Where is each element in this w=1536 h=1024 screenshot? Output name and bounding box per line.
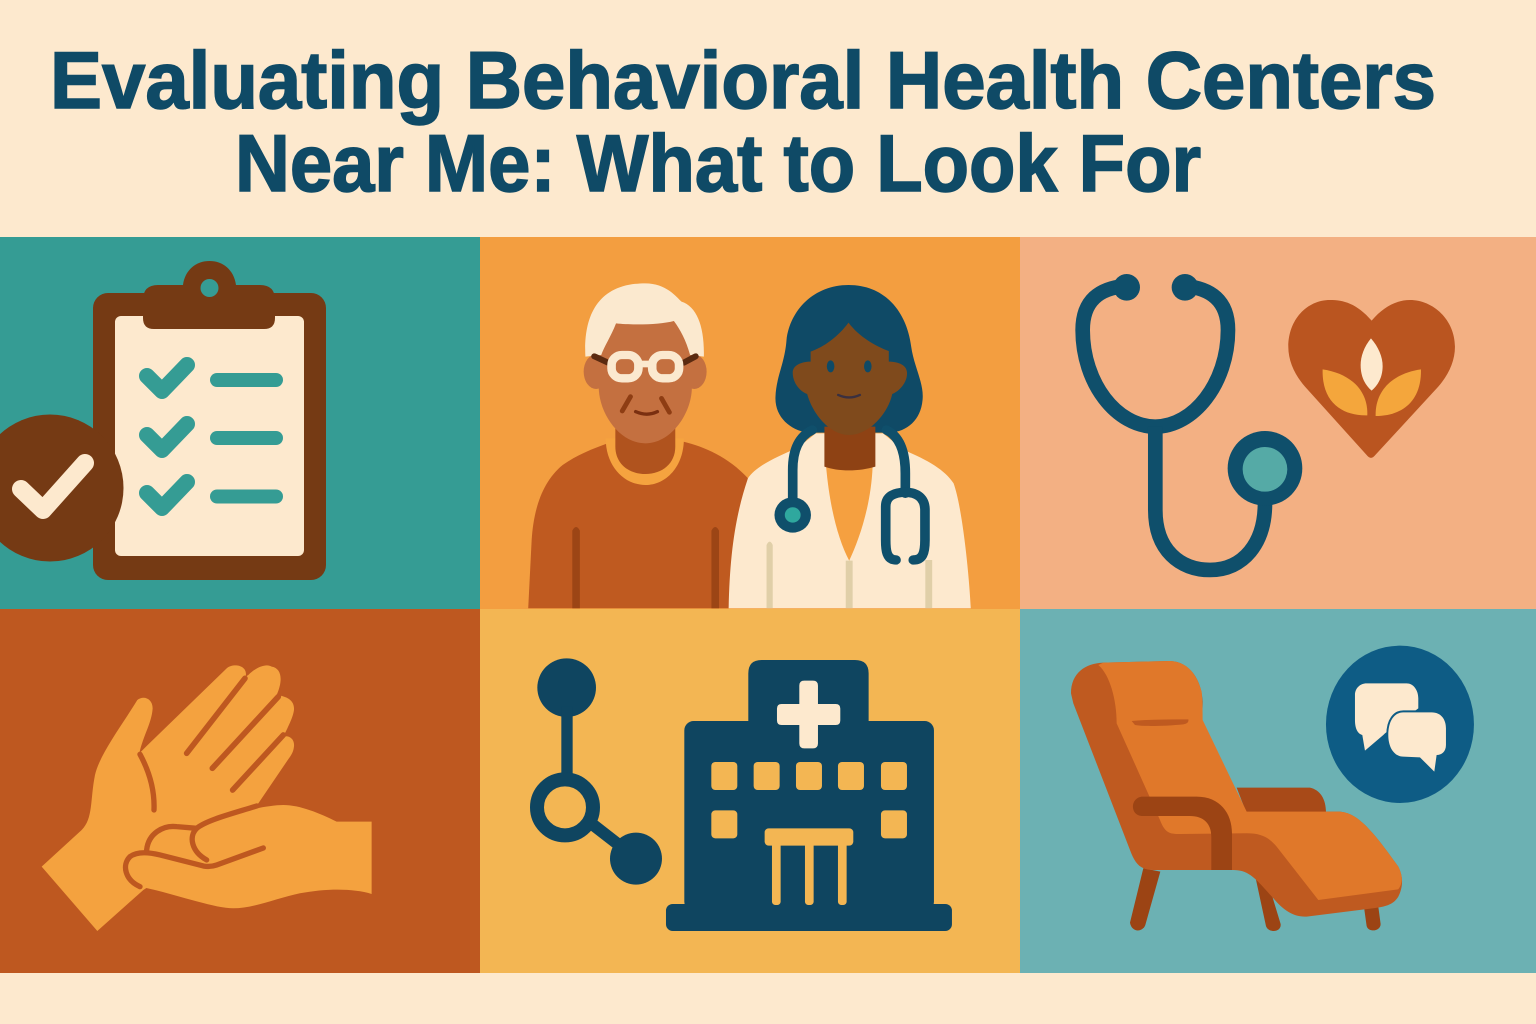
figure: doctor [729,285,971,608]
icon: lounge chair [1071,661,1402,931]
doctor's stethoscope [774,430,925,560]
checklist rows [147,365,276,508]
title: Near Me: What to Look For [235,119,1201,209]
title [50,36,1436,209]
icon: stethoscope [1083,274,1302,570]
figure: older man [528,283,748,608]
panel: therapy chair [1020,609,1536,973]
panel: caring hands [0,609,480,973]
icon: hospital [666,660,952,931]
icon: hands [42,665,372,931]
hospital windows [711,762,907,838]
hospital entrance [765,828,853,905]
panel: stethoscope and heart [1020,237,1536,609]
icon: speech bubbles [1326,646,1474,803]
hospital cross [777,681,840,748]
panel: checklist [0,237,480,609]
icon: clipboard [93,261,326,580]
icon: check badge [0,414,124,562]
icon: heart with leaves [1288,300,1455,458]
panel: hospital and network [480,609,1020,973]
panel: patient and doctor [480,237,1020,609]
title: Evaluating Behavioral Health Centers [50,36,1436,126]
icon: network nodes [537,658,662,885]
